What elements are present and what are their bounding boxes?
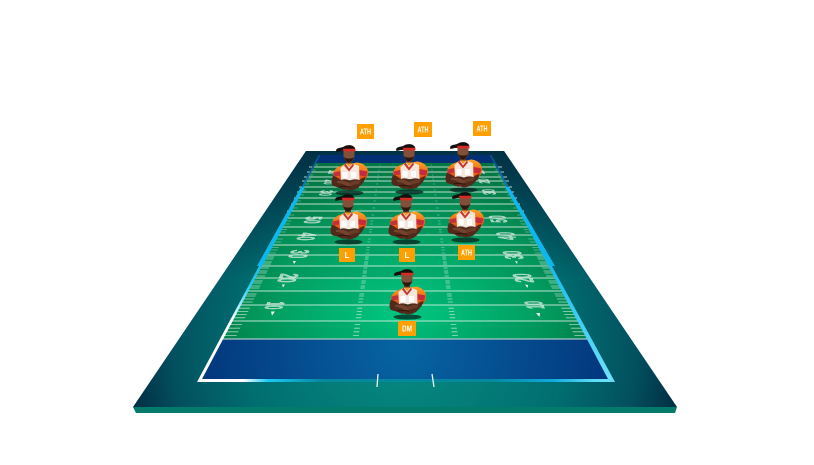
label: L (339, 248, 355, 262)
boundary frame (197, 155, 615, 382)
label: DM: DM (402, 324, 412, 334)
label: ATH: ATH (476, 124, 488, 134)
yard numbers left: 40 (291, 233, 323, 240)
playing field (224, 163, 586, 338)
label: ATH (473, 121, 491, 136)
outer surround (133, 151, 677, 407)
label: ATH: ATH (360, 128, 371, 136)
player 7 (390, 269, 426, 320)
hash marks far (268, 164, 542, 254)
yard numbers right: 30 (478, 189, 500, 195)
far end zone (316, 155, 495, 163)
yard numbers left: 50 (298, 216, 327, 224)
yard numbers left (259, 170, 340, 309)
yard number arrows (271, 261, 540, 317)
label: ATH: ATH (461, 248, 472, 258)
goal line (223, 338, 588, 340)
yard lines (232, 167, 579, 321)
near end zone (202, 339, 608, 379)
label: ATH: ATH (418, 126, 429, 134)
player 4 (330, 194, 367, 245)
label: L: L (345, 251, 350, 260)
goal post markers (377, 374, 434, 387)
yard numbers right: 40 (490, 232, 522, 240)
yard numbers left: 20 (319, 180, 338, 184)
yard numbers right: 20 (507, 273, 541, 283)
yard numbers left: 30 (315, 190, 337, 196)
yard numbers right: 50 (484, 215, 513, 223)
yard numbers right: 10 (518, 301, 550, 309)
player 2 (392, 144, 428, 195)
player 6 (448, 192, 484, 243)
hash marks near (224, 256, 586, 336)
yard numbers right (472, 170, 550, 309)
yard numbers left: 10 (259, 302, 291, 309)
yard numbers right: 30 (499, 251, 531, 259)
yard numbers left: 20 (270, 273, 304, 283)
player 1 (332, 145, 368, 196)
outer surround base (133, 407, 677, 413)
label: ATH (458, 245, 475, 260)
yard numbers right: 10 (472, 170, 488, 174)
label: DM (398, 321, 416, 336)
label: ATH (357, 124, 374, 139)
label: ATH (414, 122, 432, 137)
player 3 (446, 142, 482, 193)
pitch (133, 151, 677, 413)
cyan sideline strips (257, 187, 555, 266)
yard numbers left: 10 (325, 170, 340, 174)
yard numbers right: 20 (476, 179, 494, 183)
player 5 (388, 194, 425, 245)
yard numbers left: 30 (281, 250, 313, 258)
label: L: L (405, 251, 410, 260)
label: L (399, 248, 415, 262)
